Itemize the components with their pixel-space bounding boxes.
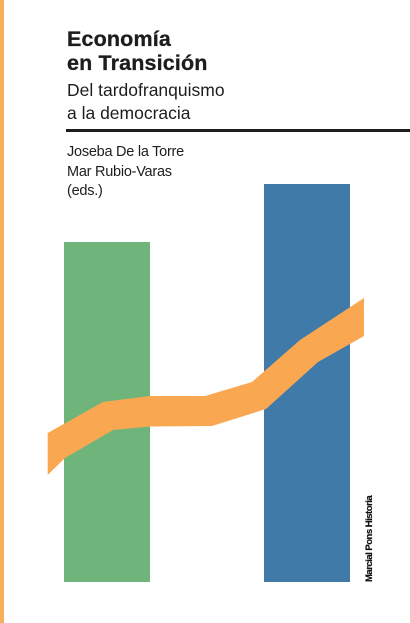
title: en Transición (67, 51, 208, 75)
title: Economía (67, 27, 171, 51)
subtitle (67, 80, 225, 123)
green bar (64, 242, 150, 582)
editors: Joseba De la Torre (67, 144, 184, 160)
editors: (eds.) (67, 183, 103, 199)
spine strip (0, 0, 4, 623)
editors: Mar Rubio-Varas (67, 164, 172, 180)
publisher imprint: Marcial Pons Historia (364, 496, 374, 582)
divider rule (66, 129, 410, 132)
blue bar (264, 184, 350, 582)
title (67, 27, 208, 75)
orange ribbon (48, 298, 364, 475)
editors (67, 144, 184, 199)
subtitle: Del tardofranquismo (67, 80, 225, 100)
subtitle: a la democracia (67, 103, 191, 123)
